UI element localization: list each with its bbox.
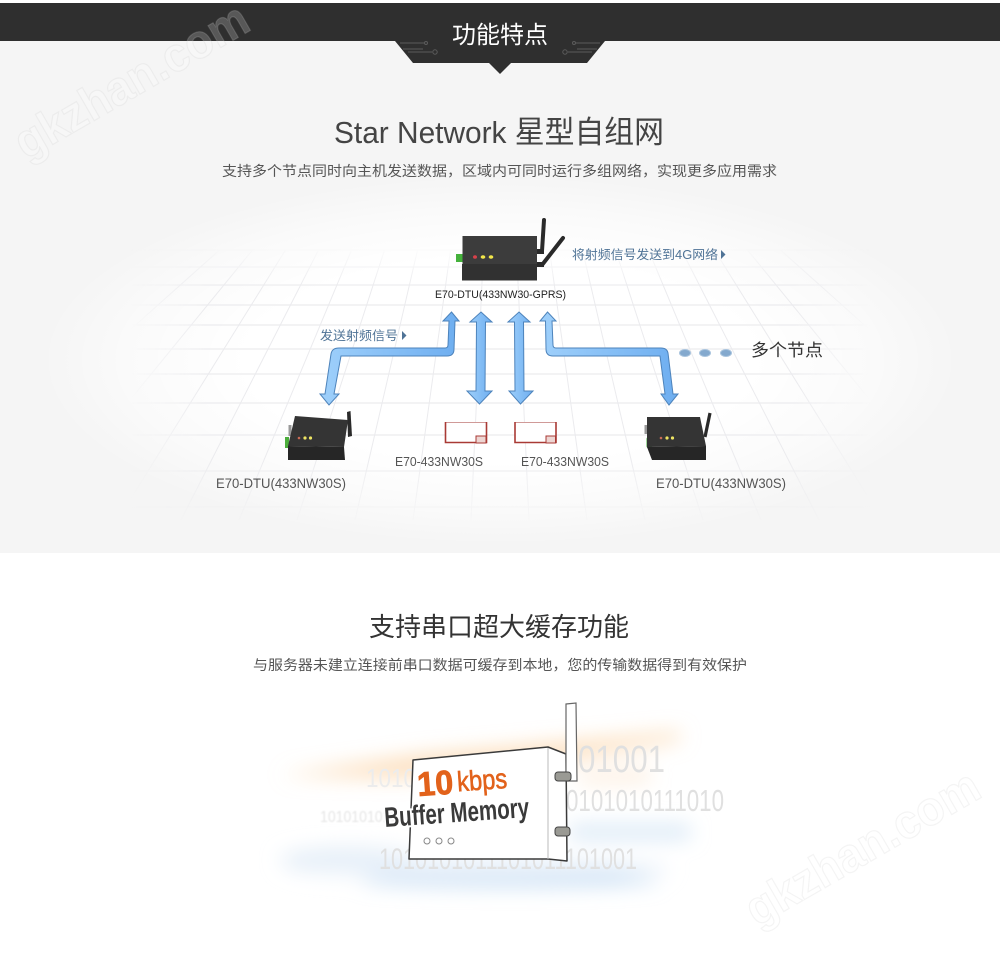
speed text: kbps (456, 763, 508, 797)
binary streams: 10101010111 (320, 809, 404, 826)
device box (409, 747, 567, 861)
label: module 2: E70-433NW30S (521, 455, 609, 469)
buffer memory text: Buffer Memory (383, 792, 530, 833)
label: module 1: E70-433NW30S (395, 455, 483, 469)
arrow: module link 1 (467, 312, 492, 404)
subheading: star network: 支持多个节点同时向主机发送数据，区域内可同时运行多组网络，实现更多应用需求 (222, 163, 777, 179)
panel: star network (0, 41, 1000, 553)
watermark: bottom right: gkzhan.com (736, 760, 989, 937)
label: left DTU: E70-DTU(433NW30S) (216, 475, 346, 491)
glow: orange and blue streaks (280, 732, 690, 886)
label: send to 4G network: 将射频信号发送到4G网络 (572, 247, 719, 262)
antenna (566, 703, 577, 781)
speed text: 10 (416, 764, 454, 804)
heading: serial buffer: 支持串口超大缓存功能 (369, 612, 629, 642)
header band (0, 3, 1000, 74)
heading: star network: Star Network 星型自组网 (334, 115, 664, 150)
header title: 功能特点 (452, 22, 548, 49)
arrow: module link 2 (508, 312, 533, 404)
connectors (555, 772, 571, 781)
icon: module 2 (515, 422, 556, 443)
illustration: buffer memory device (280, 703, 724, 886)
label: more nodes: 多个节点 (751, 341, 823, 360)
arrow: right device link (540, 312, 678, 405)
subheading: serial buffer: 与服务器未建立连接前串口数据可缓存到本地，您的传输数据得到有效保护 (253, 657, 747, 673)
icon: gateway device (456, 220, 563, 280)
label: gateway device: E70-DTU(433NW30-GPRS) (435, 289, 566, 301)
icon: module 1 (446, 422, 486, 443)
label: send RF signal: 发送射频信号 (320, 328, 398, 343)
binary streams: 01001 (578, 739, 665, 781)
binary streams: 0101010111010 (566, 783, 724, 818)
speed text (416, 760, 508, 804)
diagram: star network topology (216, 220, 823, 491)
binary streams: 1010101011101011101001 (379, 843, 637, 876)
indicator circles (424, 838, 454, 844)
binary streams (320, 739, 724, 876)
label: right DTU: E70-DTU(433NW30S) (656, 475, 786, 491)
icon: left DTU (285, 411, 352, 460)
binary streams: 1010 (366, 763, 416, 793)
icon: more nodes dots (680, 350, 732, 356)
arrow: left device link (320, 312, 459, 405)
icon: right DTU (644, 413, 710, 460)
